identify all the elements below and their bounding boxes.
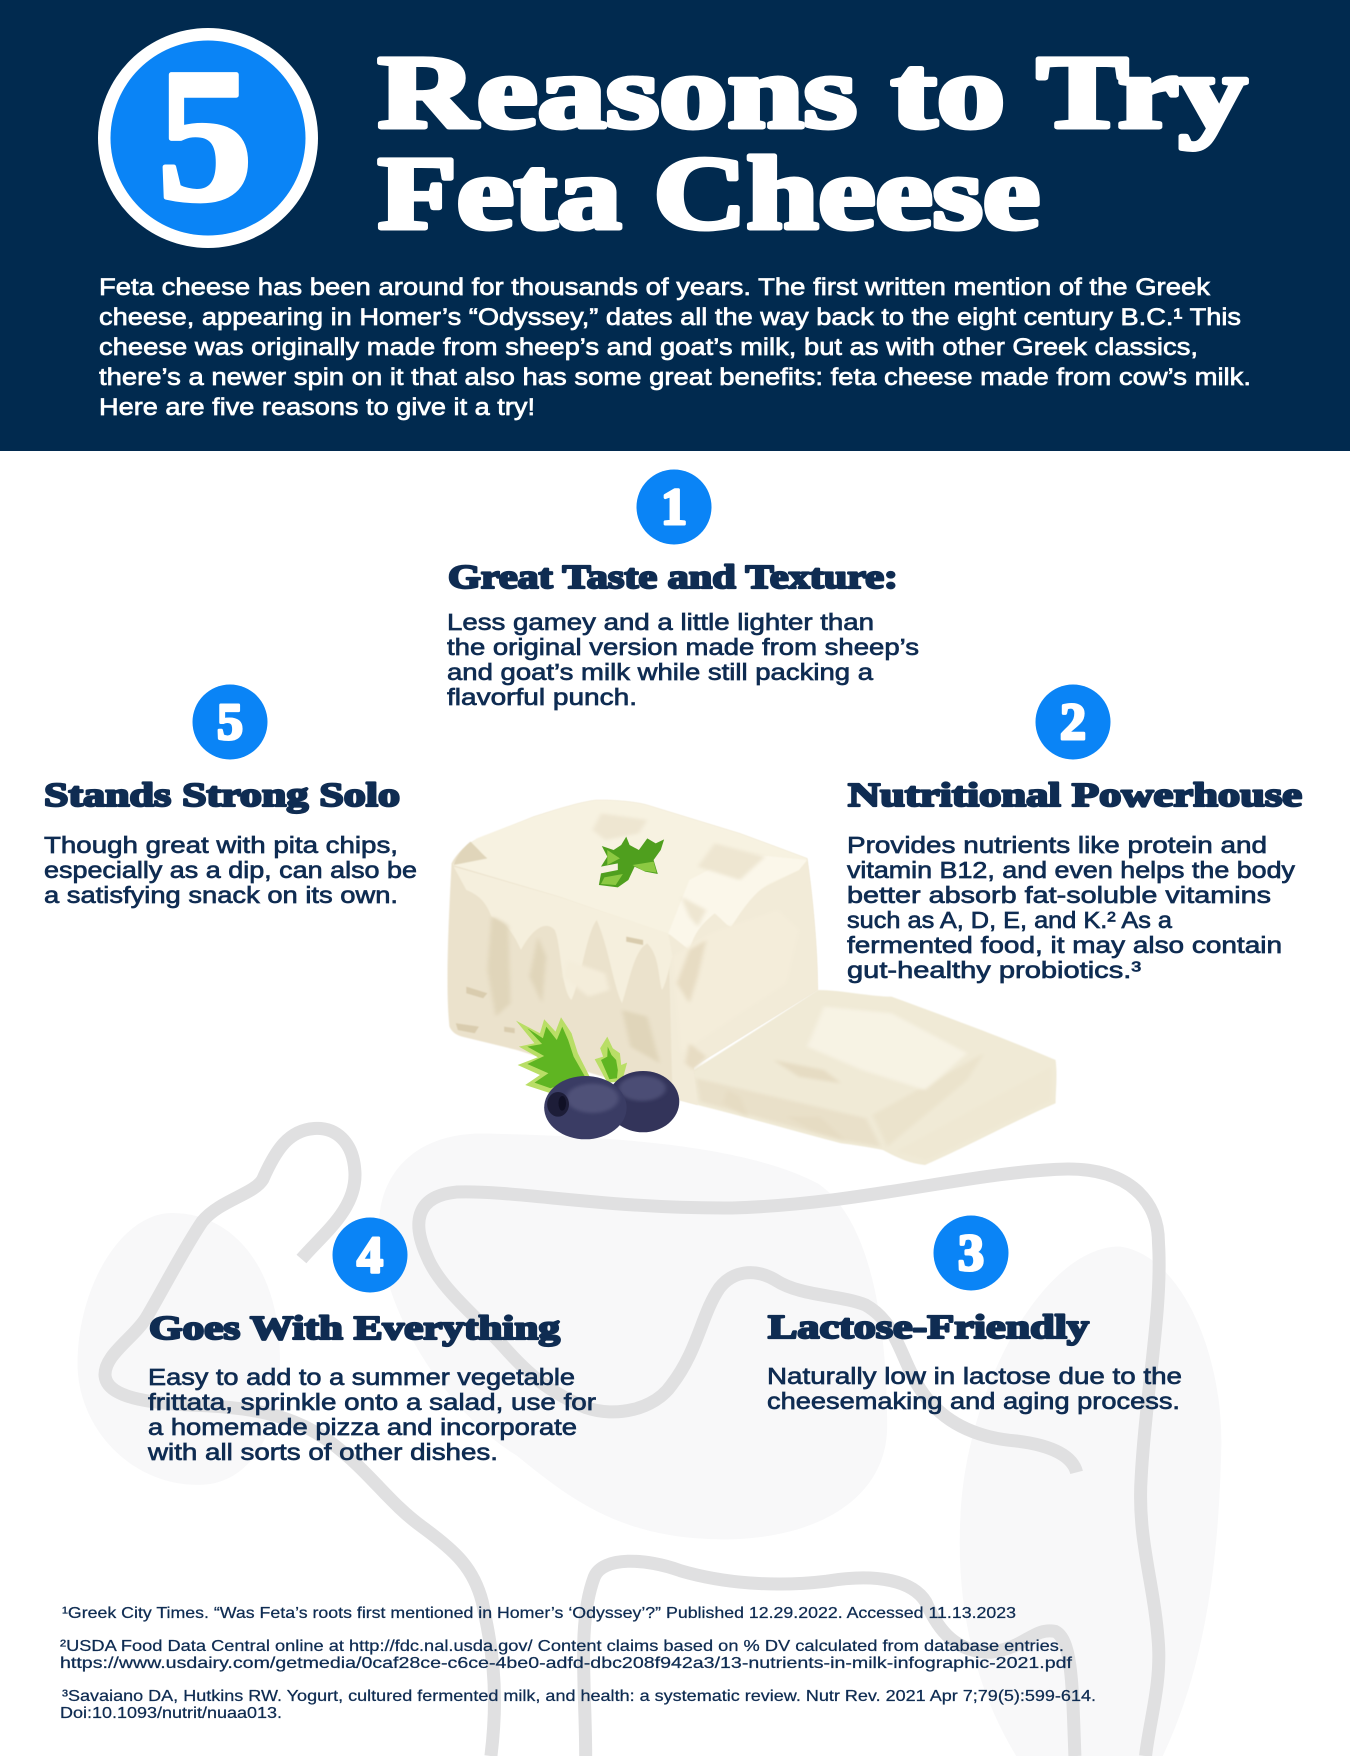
intro paragraph: Feta cheese has been around for thousands of years. The first written mention of the Greek xyxy=(99,274,1211,301)
parsley on top xyxy=(599,837,664,887)
illustration: feta cheese with olives and parsley xyxy=(447,800,1056,1165)
reason 4: goes with everything: frittata, sprinkle onto a salad, use for xyxy=(148,1389,596,1415)
reason 2: nutritional powerhouse: fermented food, it may also contain xyxy=(847,932,1282,958)
badge: number 5: 5 xyxy=(158,31,252,241)
footnotes xyxy=(60,1605,1096,1722)
reason 2: nutritional powerhouse: 2 xyxy=(1060,694,1086,751)
badge: number 5 xyxy=(98,28,318,248)
title: Feta Cheese xyxy=(378,136,1040,251)
reason 2: nutritional powerhouse: such as A, D, E, and K.² As a xyxy=(847,907,1173,933)
reason 3: lactose-friendly: Lactose-Friendly xyxy=(768,1309,1089,1346)
reason 4: goes with everything xyxy=(147,1218,596,1465)
reason 5: stands strong solo: Though great with pita chips, xyxy=(44,832,398,858)
reason 4: goes with everything: Goes With Everything xyxy=(149,1310,560,1347)
footnotes: ²USDA Food Data Central online at http://fdc.nal.usda.gov/ Content claims based on % DV calculated from database entries. xyxy=(60,1638,1064,1655)
title: Reasons to Try xyxy=(378,35,1247,150)
reason 4: goes with everything: with all sorts of other dishes. xyxy=(147,1439,498,1465)
reason 3: lactose-friendly xyxy=(767,1216,1182,1414)
parsley sprig large xyxy=(516,1017,627,1093)
reason 2: nutritional powerhouse: better absorb fat-soluble vitamins xyxy=(847,882,1271,908)
reason 3: lactose-friendly: 3 xyxy=(958,1225,984,1282)
reason 3: lactose-friendly: Naturally low in lactose due to the xyxy=(767,1363,1182,1389)
reason 1: great taste and texture: flavorful punch. xyxy=(447,684,637,710)
reason 2: nutritional powerhouse: vitamin B12, and even helps the body xyxy=(847,857,1295,883)
background cow illustration xyxy=(78,1128,1221,1756)
reason 2: nutritional powerhouse: Nutritional Powerhouse xyxy=(848,777,1302,814)
footnotes: Doi:10.1093/nutrit/nuaa013. xyxy=(60,1705,282,1722)
reason 2: nutritional powerhouse: gut-healthy probiotics.³ xyxy=(847,957,1141,983)
intro paragraph: cheese was originally made from sheep’s and goat’s milk, but as with other Greek classics, xyxy=(99,334,1198,361)
reason 1: great taste and texture xyxy=(447,470,919,710)
title xyxy=(378,35,1247,251)
intro paragraph xyxy=(99,274,1251,421)
reason 5: stands strong solo: a satisfying snack on its own. xyxy=(44,882,398,908)
intro paragraph: cheese, appearing in Homer’s “Odyssey,” dates all the way back to the eight century B.C.¹ This xyxy=(99,304,1241,331)
reason 5: stands strong solo: 5 xyxy=(217,694,243,751)
reason 3: lactose-friendly: cheesemaking and aging process. xyxy=(767,1388,1180,1414)
reason 4: goes with everything: Easy to add to a summer vegetable xyxy=(148,1364,575,1390)
reason 5: stands strong solo: especially as a dip, can also be xyxy=(44,857,417,883)
reason 4: goes with everything: 4 xyxy=(357,1227,383,1284)
intro paragraph: there’s a newer spin on it that also has some great benefits: feta cheese made from cow’s milk. xyxy=(99,364,1251,391)
reason 5: stands strong solo xyxy=(44,684,417,908)
footnotes: ¹Greek City Times. “Was Feta’s roots first mentioned in Homer’s ‘Odyssey’?” Published 12.29.2022. Accessed 11.13.2023 xyxy=(62,1605,1016,1622)
reason 1: great taste and texture: and goat’s milk while still packing a xyxy=(447,659,874,685)
reason 1: great taste and texture: the original version made from sheep’s xyxy=(447,634,919,660)
reason 5: stands strong solo: Stands Strong Solo xyxy=(44,777,400,814)
reason 2: nutritional powerhouse: Provides nutrients like protein and xyxy=(847,832,1267,858)
cheese slice xyxy=(694,990,1056,1165)
olives xyxy=(544,1071,679,1139)
cheese block xyxy=(447,800,818,1105)
reason 1: great taste and texture: Less gamey and a little lighter than xyxy=(447,609,874,635)
header band xyxy=(0,0,1350,451)
reason 4: goes with everything: a homemade pizza and incorporate xyxy=(148,1414,577,1440)
footnotes: https://www.usdairy.com/getmedia/0caf28ce-c6ce-4be0-adfd-dbc208f942a3/13-nutrients-in-milk-infographic-2021.pdf xyxy=(60,1655,1073,1672)
reason 2: nutritional powerhouse xyxy=(847,684,1302,983)
reason 1: great taste and texture: 1 xyxy=(661,479,687,536)
intro paragraph: Here are five reasons to give it a try! xyxy=(99,394,535,421)
footnotes: ³Savaiano DA, Hutkins RW. Yogurt, cultured fermented milk, and health: a systematic review. Nutr Rev. 2021 Apr 7;79(5):599-614. xyxy=(62,1688,1096,1705)
reason 1: great taste and texture: Great Taste and Texture: xyxy=(448,559,898,596)
